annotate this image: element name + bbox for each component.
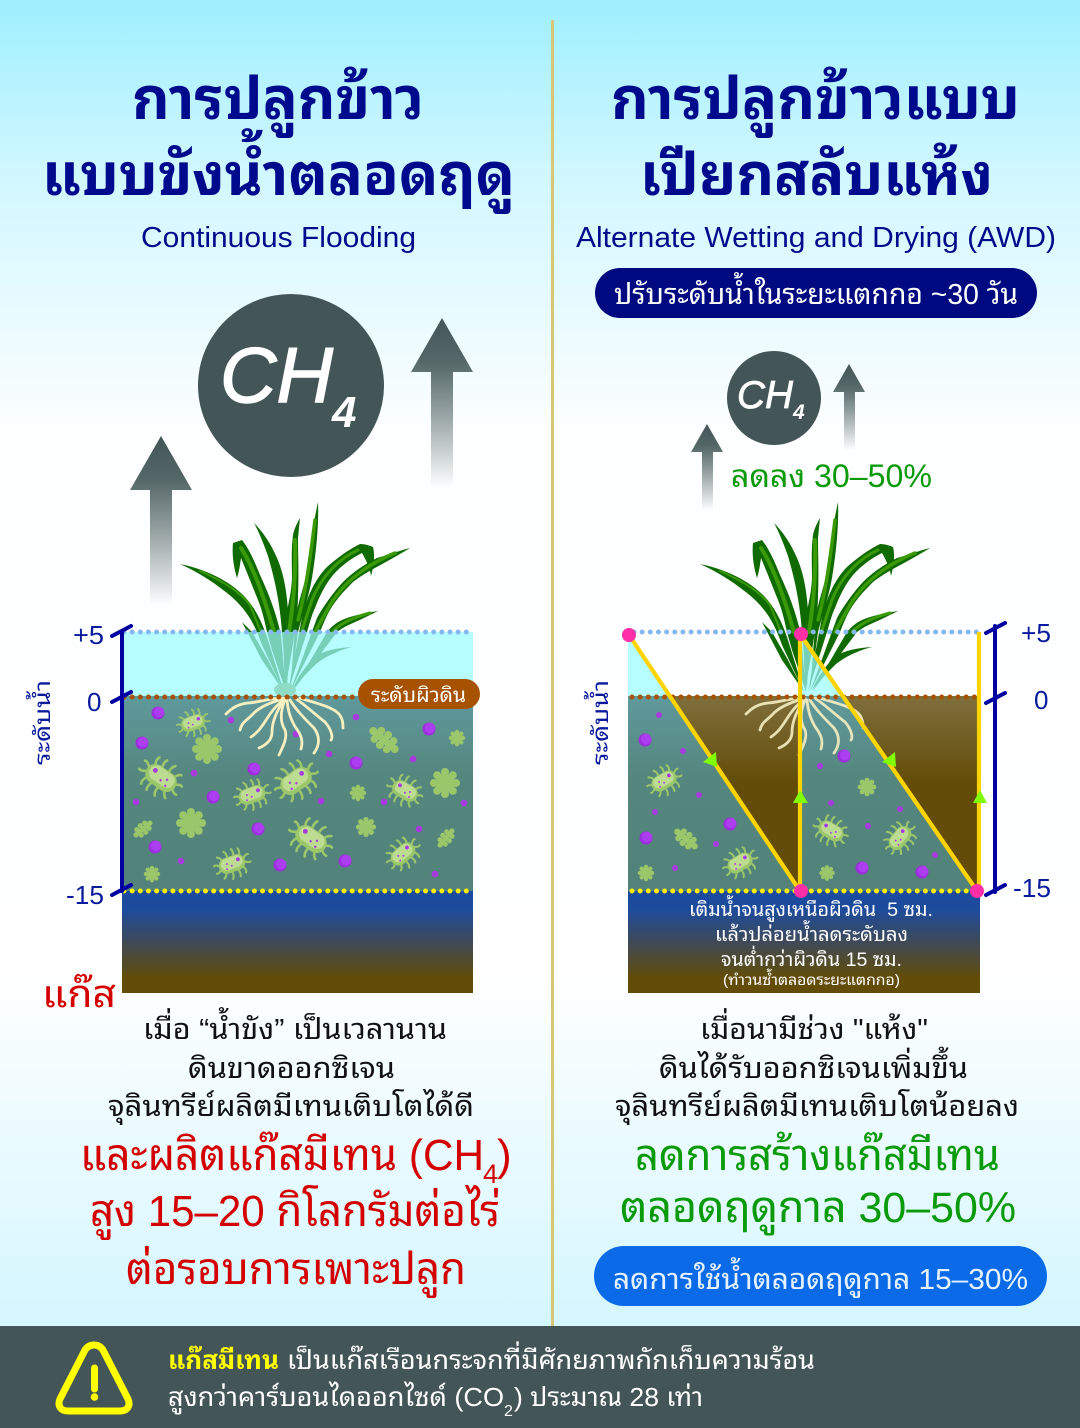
label: soil surface: ระดับผิวดิน (371, 685, 466, 707)
icon: warning triangle (59, 1345, 129, 1411)
icon: small CH4 circle (727, 351, 821, 445)
pill: tillering interval (595, 268, 1037, 318)
heading: AWD: เปียกสลับแห้ง (640, 143, 993, 208)
text block: methane reduction (620, 1132, 1016, 1235)
text block: cycle description: (ทำวนซ้ำตลอดระยะแตกกอ) (723, 968, 900, 989)
text block: AWD explanation: จุลินทรีย์ผลิตมีเทนเติบโตน้อยลง (615, 1088, 1019, 1125)
icon: small CH4 circle: 4 (792, 401, 805, 424)
pill: water saving: ลดการใช้น้ำตลอดฤดูกาล 15–30% (613, 1257, 1028, 1298)
heading: continuous flooding: Continuous Flooding (141, 222, 416, 254)
text block: methane emission: ต่อรอบการเพาะปลูก (126, 1245, 466, 1298)
text block: AWD explanation: เมื่อนามีช่วง "แห้ง" (700, 1008, 928, 1046)
text block: methane note: 2 (504, 1403, 513, 1420)
arrow: right small (833, 364, 865, 450)
pill: tillering interval: ปรับระดับน้ำในระยะแตกกอ ~30 วัน (614, 272, 1018, 311)
pill: water saving (594, 1246, 1047, 1306)
text block: methane note: เป็นแก๊สเรือนกระจกที่มีศักยภาพกักเก็บความร้อน (287, 1341, 815, 1375)
axis: water level scale: 0 (87, 687, 101, 717)
text block: methane note (168, 1341, 815, 1420)
heading: AWD: Alternate Wetting and Drying (AWD) (576, 222, 1056, 254)
arrow: left small (691, 424, 723, 510)
heading: continuous flooding (42, 67, 515, 254)
icon: CH4 circle (198, 294, 384, 477)
icon: CH4 circle: CH (220, 331, 334, 419)
text block: cycle description: แล้วปล่อยน้ำลดระดับลง (715, 920, 908, 946)
text block: flooding explanation: ดินขาดออกซิเจน (188, 1053, 395, 1085)
arrow: right gas arrow (411, 318, 473, 487)
text block: methane emission: ) (497, 1131, 512, 1180)
axis: water level scale (25, 620, 131, 910)
panel: AWD (576, 67, 1056, 1306)
axis: water level scale: +5 (73, 620, 104, 650)
heading: continuous flooding: แบบขังน้ำตลอดฤดู (42, 128, 515, 214)
arrow: left gas arrow (130, 436, 192, 605)
text block: flooding explanation (108, 1007, 474, 1125)
text block: methane note: ) ประมาณ 28 เท่า (514, 1382, 703, 1412)
chart: water level cycle lines (622, 627, 987, 898)
text block: cycle description: เติมน้ำจนสูงเหนือผิวดิน 5 ซม. (689, 895, 933, 923)
text block: AWD explanation: ดินได้รับออกซิเจนเพิ่มขึ้น (659, 1046, 968, 1085)
text block: cycle description (689, 895, 933, 989)
axis: water level scale right: 0 (1034, 685, 1048, 715)
label: soil surface (358, 679, 480, 709)
text block: methane note: แก๊สมีเทน (168, 1344, 279, 1375)
axis: water level scale right: ระดับน้ำ (583, 680, 613, 765)
text block: flooding explanation: จุลินทรีย์ผลิตมีเทนเติบโตได้ดี (108, 1087, 474, 1125)
label: gas: แก๊ส (42, 972, 116, 1016)
axis: water level scale: ระดับน้ำ (25, 680, 55, 765)
axis: water level scale right: -15 (1013, 873, 1051, 903)
axis: water level scale: -15 (66, 880, 104, 910)
text block: methane emission: 4 (483, 1159, 498, 1189)
axis: water level scale right: +5 (1021, 618, 1051, 648)
text block: methane emission: และผลิตแก๊สมีเทน (CH (80, 1130, 484, 1180)
text block: methane emission: สูง 15–20 กิโลกรัมต่อไร่ (90, 1184, 500, 1240)
text block: methane reduction: ตลอดฤดูกาล 30–50% (620, 1184, 1016, 1235)
text block: AWD explanation (615, 1008, 1019, 1125)
footer band (0, 1326, 1080, 1428)
soil diagram AWD (628, 502, 980, 993)
text block: methane note: สูงกว่าคาร์บอนไดออกไซด์ (CO (168, 1380, 504, 1415)
axis: water level scale right (583, 618, 1051, 903)
text block: cycle description: จนต่ำกว่าผิวดิน 15 ซม. (721, 945, 902, 971)
heading: AWD (576, 67, 1056, 254)
label: reduced 30-50%: ลดลง 30–50% (731, 458, 932, 494)
panel: continuous flooding (25, 67, 515, 1298)
text block: flooding explanation: เมื่อ “น้ำขัง” เป็นเวลานาน (143, 1007, 447, 1046)
heading: continuous flooding: การปลูกข้าว (132, 67, 424, 138)
text block: methane reduction: ลดการสร้างแก๊สมีเทน (635, 1132, 1000, 1180)
heading: AWD: การปลูกข้าวแบบ (611, 67, 1020, 138)
soil diagram (122, 502, 473, 993)
icon: CH4 circle: 4 (331, 388, 356, 437)
text block: methane emission (80, 1130, 512, 1298)
divider line (551, 20, 554, 1326)
icon: small CH4 circle: CH (737, 374, 794, 417)
